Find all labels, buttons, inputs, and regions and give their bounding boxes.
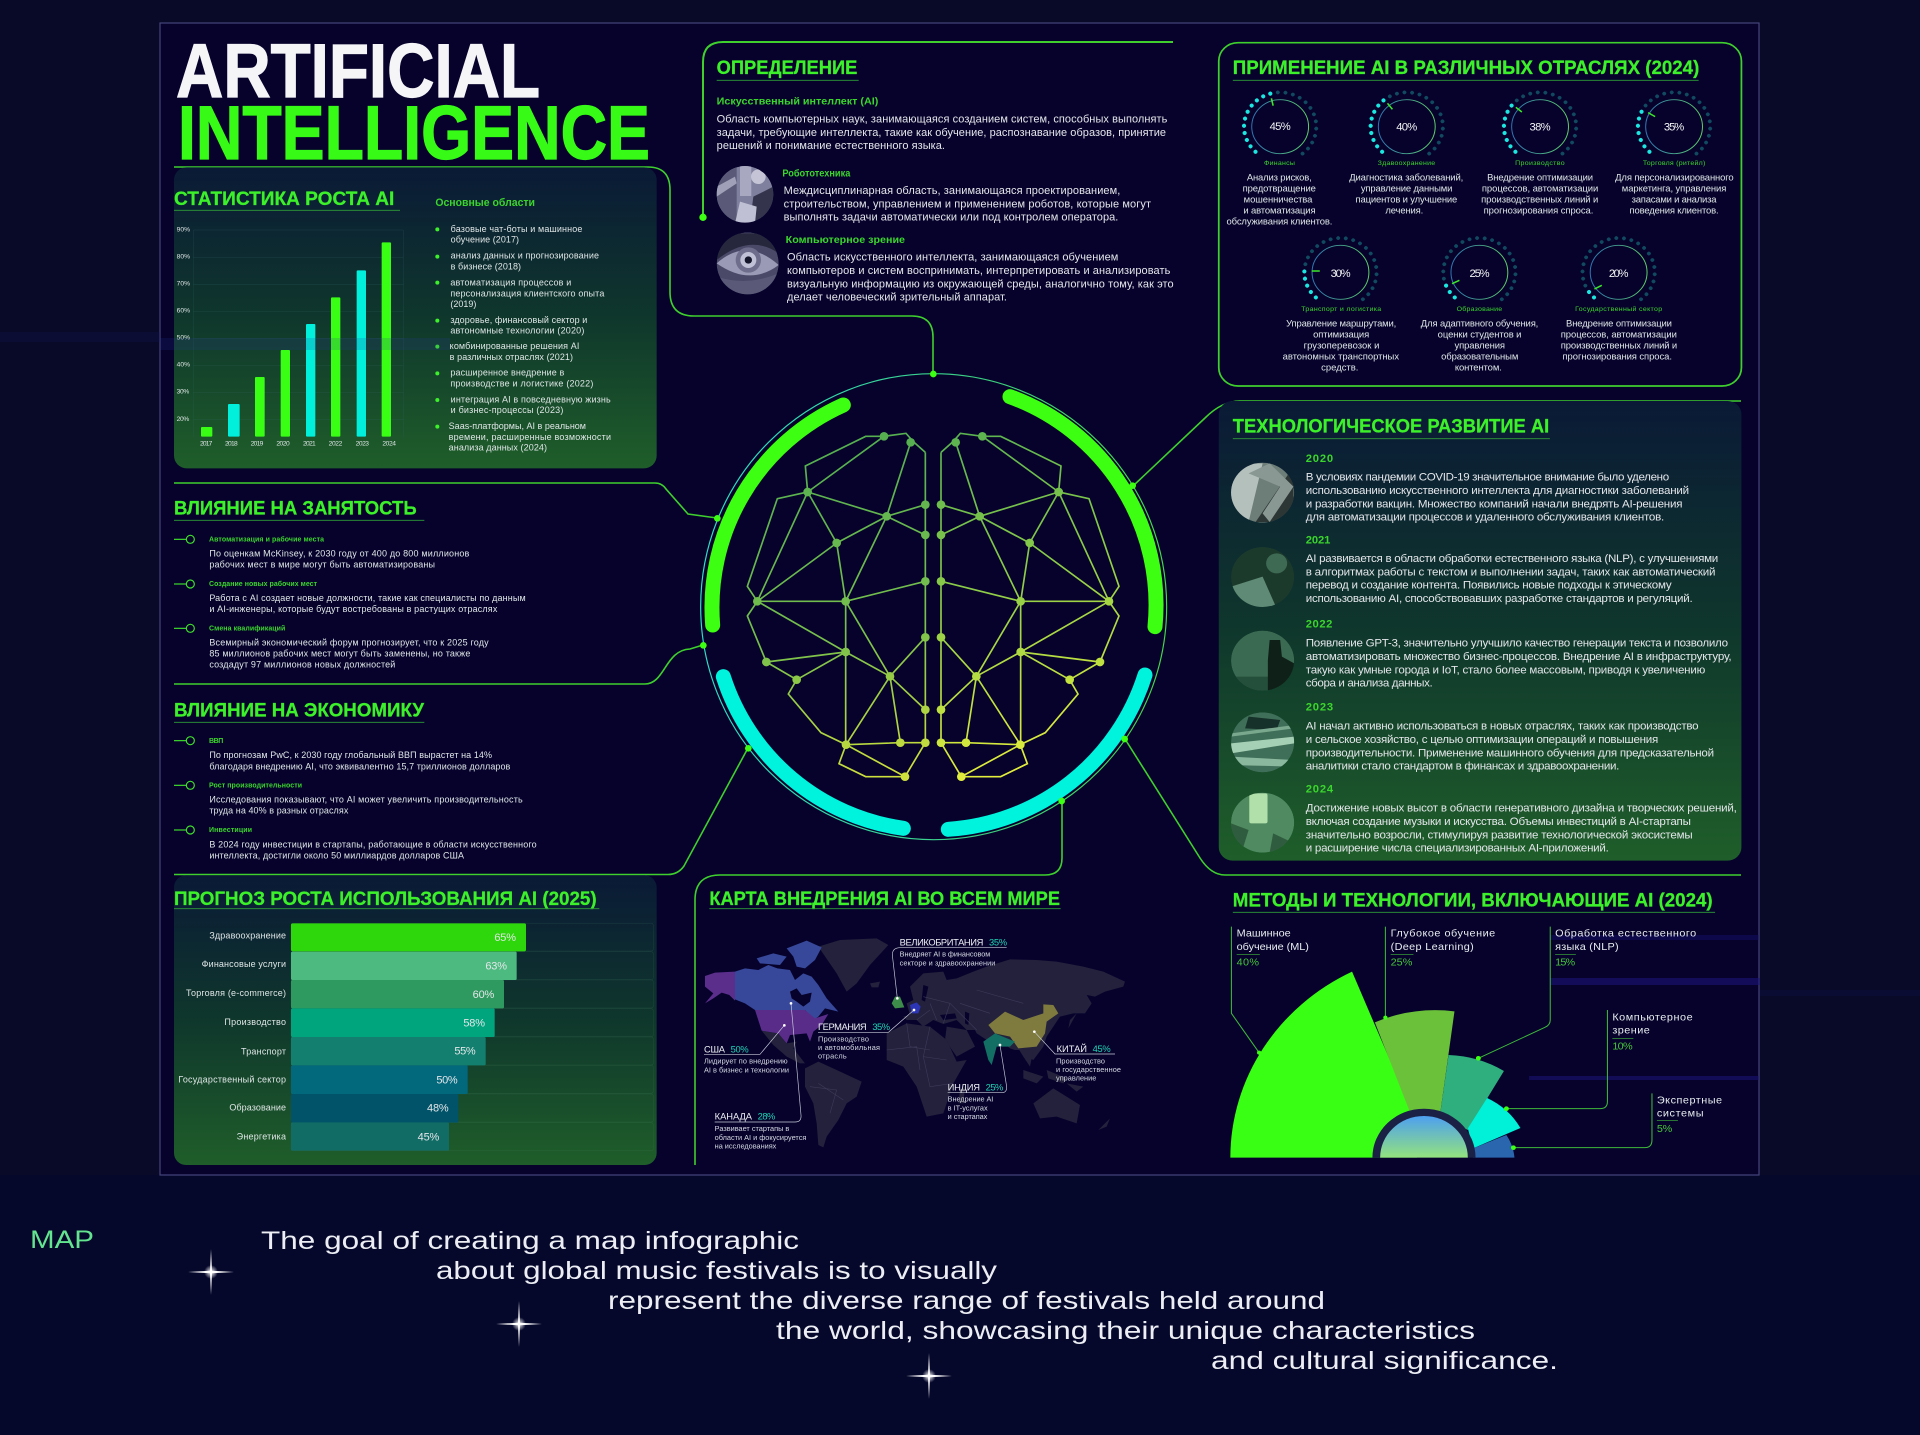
label: computer vision — [1504, 1010, 1693, 1111]
item: new jobs: Создание новых рабочих мест — [209, 580, 318, 588]
callout: USA: США — [704, 1044, 726, 1054]
horizontal bar chart: Транспорт — [241, 1046, 286, 1056]
gauge: education 25%: контентом. — [1455, 363, 1502, 372]
gauge: government 20%: производственных линий и — [1561, 341, 1677, 350]
item: investment: интеллекта, достигли около 50 миллиардов долларов США — [209, 850, 464, 860]
heading: employment: ВЛИЯНИЕ НА ЗАНЯТОСТЬ — [174, 499, 417, 520]
entry: 2020: для автоматизации процессов и удаленного обслуживания клиентов. — [1306, 512, 1664, 524]
entry: 2022 — [1231, 619, 1732, 692]
gauge: education 25%: Для адаптивного обучения, — [1421, 319, 1538, 328]
entry: 2020: В условиях пандемии COVID-19 значительное внимание было уделено — [1306, 472, 1669, 484]
list: main areas: в бизнесе (2018) — [451, 261, 521, 271]
brain: right hemisphere — [937, 432, 1119, 781]
gauge: finance 45%: мошенничества — [1244, 195, 1313, 204]
central brain diagram — [700, 371, 1167, 840]
label: NLP — [1476, 927, 1696, 1061]
bar chart: 2022 — [329, 441, 343, 448]
list: main areas: анализ данных и прогнозирование — [451, 251, 599, 261]
callout: India: ИНДИЯ — [948, 1083, 980, 1093]
title: ARTIFICIAL — [176, 29, 540, 114]
list: main areas: в различных отраслях (2021) — [450, 352, 573, 362]
horizontal bar chart: Энергетика — [237, 1132, 286, 1142]
callout: China: и государственное — [1056, 1065, 1121, 1074]
horizontal bar chart: Здравоохранение — [209, 931, 286, 941]
label: computer vision: Компьютерное — [1612, 1012, 1693, 1023]
label: deep learning: (Deep Learning) — [1391, 941, 1474, 953]
item: GDP — [174, 737, 511, 771]
entry: 2023: и сельское хозяйство, с целью оптимизации операций и повышения — [1306, 734, 1658, 746]
bar chart: 2018 — [225, 441, 238, 448]
gauge: manufacturing 38%: производственных линий и — [1481, 195, 1598, 204]
icon: sparkle 3 — [906, 1353, 952, 1399]
gauge: transport 30%: автономных транспортных — [1283, 352, 1399, 361]
horizontal bar chart — [178, 923, 653, 1151]
callout: China — [1033, 1030, 1121, 1083]
heading: statistics: СТАТИСТИКА РОСТА AI — [174, 189, 394, 210]
text: computer vision: визуальную информацию из окружающей среды, аналогично тому, как это — [787, 278, 1174, 290]
gauge: healthcare 40%: Диагностика заболеваний, — [1349, 173, 1463, 182]
entry: 2020: и разработки вакцин. Множество компаний начали внедрять AI-решения — [1306, 499, 1682, 510]
bar chart: 40% — [177, 362, 190, 369]
callout: Germany: и автомобильная — [818, 1043, 880, 1052]
list: main areas: расширенное внедрение в — [450, 368, 565, 378]
caption text: The goal of creating a map infographic — [261, 1227, 799, 1255]
gauge: education 25%: 25% — [1470, 268, 1490, 280]
list: main areas: персонализация клиентского опыта — [450, 288, 604, 298]
gauge: transport 30%: 30% — [1331, 268, 1351, 280]
entry: 2020 — [1231, 453, 1689, 524]
text: robotics: строительством, управлением и применением роботов, которые могут — [784, 198, 1151, 210]
gauge: manufacturing 38%: прогнозирования спроса. — [1484, 206, 1593, 215]
label: machine learning: обучение (ML) — [1237, 941, 1309, 953]
gauge: healthcare 40%: пациентов и улучшение — [1356, 195, 1457, 204]
horizontal bar chart: 50% — [436, 1074, 458, 1086]
callout: Canada: на исследованиях — [715, 1142, 777, 1151]
list: main areas: обучение (2017) — [451, 235, 519, 245]
text: artificial intelligence: решений и понимание естественного языка. — [717, 140, 945, 152]
label: deep learning: 25% — [1391, 957, 1413, 969]
gauge: manufacturing 38%: Внедрение оптимизации — [1487, 173, 1593, 182]
item: investment: В 2024 году инвестиции в стартапы, работающие в области искусственного — [209, 839, 537, 849]
list: main areas: интеграция AI в повседневную жизнь — [451, 394, 611, 404]
label: deep learning — [1383, 927, 1495, 1020]
item: productivity: Рост производительности — [209, 783, 302, 790]
item: new jobs: Работа с AI создает новые должности, такие как специалисты по данным — [209, 593, 526, 603]
text: artificial intelligence: Область компьютерных наук, занимающаяся созданием систем, способных выполнять — [717, 114, 1168, 126]
gauge: healthcare 40%: 40% — [1396, 122, 1418, 134]
icon: sparkle 1 — [188, 1249, 234, 1295]
entry: 2024: значительно возросли, стимулируя развитие технологической экосистемы — [1306, 830, 1693, 841]
arc: top left — [712, 405, 843, 625]
gauge: transport 30%: грузоперевозок и — [1304, 341, 1379, 350]
brain: left hemisphere — [747, 432, 930, 781]
list: main areas: автоматизация процессов и — [450, 277, 571, 287]
item: automation: рабочих мест в мире могут быть автоматизированы — [209, 560, 435, 570]
item: GDP: благодаря внедрению AI, что эквивалентно 15,7 триллионов долларов — [209, 761, 511, 771]
gauge: retail 35%: маркетинга, управления — [1622, 184, 1726, 193]
world map — [705, 938, 1125, 1147]
photo: robotics — [717, 166, 773, 223]
panel: technological development — [1219, 401, 1741, 861]
callout: India — [948, 1044, 1007, 1121]
entry: 2021 — [1231, 535, 1718, 608]
entry: 2021: перевод и создание контента. Появились новые подходы к этическому — [1306, 580, 1672, 592]
panel: employment impact — [174, 499, 526, 670]
gauge: manufacturing 38%: 38% — [1530, 122, 1551, 134]
bar chart: 20% — [177, 416, 189, 423]
callout: Canada — [715, 1002, 806, 1151]
callout: USA — [704, 1024, 789, 1074]
caption text: the world, showcasing their unique characteristics — [776, 1317, 1475, 1345]
horizontal bar chart: Производство — [224, 1017, 286, 1027]
entry: 2022: автоматизировать множество бизнес-процессов. Внедрение AI в инфраструктуру, — [1306, 651, 1732, 663]
label: machine learning: 40% — [1237, 957, 1260, 969]
entry: 2023: 2023 — [1306, 702, 1333, 714]
callout: Canada: 28% — [758, 1112, 775, 1122]
callout: UK: ВЕЛИКОБРИТАНИЯ — [900, 937, 983, 947]
callout: Germany: Производство — [818, 1034, 869, 1043]
horizontal bar chart: 48% — [427, 1103, 449, 1115]
label: machine learning: Машинное — [1237, 928, 1291, 940]
callout: UK: секторе и здравоохранении — [900, 959, 995, 968]
gauge: healthcare 40%: управление данными — [1361, 184, 1452, 193]
item: productivity: труда на 40% в разных отраслях — [209, 806, 349, 816]
arc: bottom right — [948, 675, 1145, 829]
list: main areas: Основные области — [435, 197, 535, 209]
horizontal bar chart: 63% — [485, 960, 507, 972]
arc: bottom left — [723, 677, 903, 828]
entry: 2021: в алгоритмах работы с текстом и выполнении задач, таких как автоматический — [1306, 567, 1715, 578]
gauge: education 25%: оценки студентов и — [1438, 330, 1521, 339]
gauge: government 20%: 20% — [1609, 268, 1629, 280]
bar chart: 2017 — [200, 441, 213, 448]
gauge: education 25% — [1421, 224, 1538, 372]
connector lines — [174, 42, 1741, 1165]
heading: forecast: ПРОГНОЗ РОСТА ИСПОЛЬЗОВАНИЯ AI (2025) — [174, 889, 597, 910]
ring connector dots — [700, 371, 1136, 804]
bar chart: 90% — [177, 226, 190, 233]
list: main areas: Saas-платформы, AI в реальном — [449, 421, 586, 431]
gauge: healthcare 40%: Здавоохранение — [1378, 160, 1435, 167]
item: productivity — [174, 781, 523, 816]
label: expert systems — [1511, 1093, 1722, 1150]
text: computer vision: Компьютерное зрение — [786, 235, 905, 246]
callout: India: 25% — [986, 1083, 1003, 1093]
entry: 2023: AI начал активно использоваться в новых отраслях, таких как производство — [1306, 721, 1699, 733]
panel: world map — [704, 889, 1125, 1151]
callout: UK: 35% — [989, 937, 1007, 947]
horizontal bar chart: Торговля (e-commerce) — [186, 988, 286, 998]
entry: 2022: 2022 — [1306, 619, 1332, 631]
bar chart: 2024 — [382, 441, 396, 448]
label: computer vision: зрение — [1612, 1025, 1650, 1037]
heading: methods: МЕТОДЫ И ТЕХНОЛОГИИ, ВКЛЮЧАЮЩИЕ AI (2024) — [1233, 890, 1713, 911]
text: robotics: Робототехника — [782, 167, 851, 179]
callout: USA: 50% — [731, 1044, 749, 1054]
heading: applications: ПРИМЕНЕНИЕ AI В РАЗЛИЧНЫХ ОТРАСЛЯХ (2024) — [1233, 57, 1699, 79]
horizontal bar chart: 45% — [418, 1131, 440, 1143]
label: computer vision: 10% — [1612, 1041, 1633, 1052]
gauge: finance 45%: Финансы — [1264, 160, 1295, 167]
text: computer vision: делает человеческий зрительный аппарат. — [787, 292, 1007, 304]
horizontal bar chart: 65% — [494, 932, 516, 944]
caption text — [261, 1227, 1558, 1375]
bar chart: 2023 — [356, 441, 369, 448]
gauge: manufacturing 38%: процессов, автоматизации — [1482, 184, 1598, 193]
item: investment — [174, 826, 537, 860]
label: expert systems: системы — [1657, 1108, 1704, 1120]
callout: Canada: области AI и фокусируется — [715, 1133, 806, 1142]
callout: UK: Внедряет AI в финансовом — [900, 950, 990, 959]
photo: eye — [717, 232, 779, 294]
bar chart: 2019 — [251, 441, 264, 448]
bar chart: 70% — [177, 281, 190, 288]
gauge: education 25%: управления — [1454, 341, 1505, 350]
entry: 2024: включая создание музыки и искусства. Объемы инвестиций в AI-стартапы — [1306, 816, 1691, 828]
item: automation: По оценкам McKinsey, к 2030 году от 400 до 800 миллионов — [209, 548, 470, 558]
heading: map: КАРТА ВНЕДРЕНИЯ AI ВО ВСЕМ МИРЕ — [709, 889, 1060, 910]
callout: USA: AI в бизнес и технологии — [704, 1065, 789, 1074]
list: main areas — [435, 197, 611, 453]
gauge: transport 30% — [1283, 224, 1399, 372]
label: expert systems: 5% — [1657, 1123, 1673, 1135]
gauge: finance 45%: Анализ рисков, — [1247, 173, 1312, 182]
bar chart: 30% — [177, 389, 189, 396]
item: GDP: ВВП — [209, 738, 223, 745]
radial chart — [1230, 972, 1520, 1158]
text: robotics: Междисциплинарная область, занимающаяся проектированием, — [784, 185, 1120, 197]
horizontal bar chart: Государственный сектор — [178, 1074, 286, 1084]
caption text: about global music festivals is to visually — [436, 1257, 998, 1285]
panel: definition — [699, 58, 1174, 304]
text: robotics — [782, 167, 1151, 224]
callout: China: 45% — [1093, 1044, 1111, 1054]
entry: 2022: Появление GPT-3, значительно улучшило качество генерации текста и позволило — [1306, 638, 1728, 650]
label: deep learning: Глубокое обучение — [1391, 928, 1495, 940]
text: artificial intelligence: Искусственный интеллект (AI) — [717, 97, 878, 108]
gauge: manufacturing 38%: Производство — [1515, 160, 1565, 167]
callout: Germany: ГЕРМАНИЯ — [818, 1022, 867, 1032]
item: new jobs — [174, 580, 526, 614]
item: requalification: Смена квалификаций — [209, 624, 285, 632]
gauge: education 25%: Образование — [1457, 305, 1502, 313]
entry: 2021: AI развивается в области обработки естественного языка (NLP), с улучшениями — [1306, 553, 1718, 565]
horizontal bar chart: 55% — [454, 1046, 476, 1058]
heading: economy: ВЛИЯНИЕ НА ЭКОНОМИКУ — [174, 700, 424, 721]
list: main areas: производстве и логистике (2022) — [450, 378, 593, 388]
entry: 2024 — [1231, 784, 1737, 855]
heading: definition: ОПРЕДЕЛЕНИЕ — [717, 58, 857, 79]
gauge: government 20%: процессов, автоматизации — [1561, 330, 1677, 339]
callout: Canada: КАНАДА — [715, 1112, 753, 1122]
item: new jobs: и AI-инженеры, которые будут востребованы в растущих отраслях — [209, 604, 498, 614]
entry: 2023: аналитики стало стандартом в финансах и здравоохранении. — [1306, 761, 1619, 773]
item: investment: Инвестиции — [209, 827, 252, 834]
entry: 2020: 2020 — [1306, 453, 1333, 465]
item: automation: Автоматизация и рабочие места — [209, 536, 324, 544]
gauge: finance 45% — [1226, 78, 1332, 226]
gauge: transport 30%: Управление маршрутами, — [1286, 319, 1396, 328]
gauge: retail 35%: запасами и анализа — [1632, 195, 1717, 204]
caption label: MAP: MAP — [30, 1226, 94, 1254]
callout: China: управление — [1056, 1074, 1096, 1083]
item: automation — [174, 535, 470, 570]
list: main areas: (2019) — [450, 299, 476, 309]
text: robotics: выполнять задачи автоматически или под контролем оператора. — [784, 212, 1118, 224]
entry: 2024: 2024 — [1306, 784, 1334, 796]
gauge: transport 30%: Транспорт и логистика — [1301, 306, 1381, 313]
entry: 2021: 2021 — [1306, 535, 1330, 546]
bar chart: 2021 — [303, 441, 316, 448]
gauge: retail 35%: поведения клиентов. — [1630, 206, 1719, 215]
text: computer vision — [786, 235, 1174, 304]
arc: top right — [1010, 397, 1156, 627]
entry: 2024: и расширение числа специализированных AI-приложений. — [1306, 843, 1609, 855]
entry: 2023: производительности. Применение машинного обучения для предсказательной — [1306, 748, 1714, 759]
gauge: transport 30%: средств. — [1321, 363, 1358, 372]
callout: China: КИТАЙ — [1057, 1043, 1087, 1054]
item: requalification: Всемирный экономический форум прогнозирует, что к 2025 году — [209, 638, 489, 648]
gauge: finance 45%: 45% — [1270, 121, 1291, 133]
label: expert systems: Экспертные — [1657, 1095, 1722, 1106]
item: GDP: По прогнозам PwC, к 2030 году глобальный ВВП вырастет на 14% — [209, 750, 492, 760]
label: NLP: 15% — [1555, 957, 1576, 969]
panel: growth forecast — [174, 875, 657, 1165]
callout: India: и стартапах — [948, 1112, 988, 1121]
entry: 2024: Достижение новых высот в области генеративного дизайна и творческих решений, — [1306, 803, 1737, 815]
callout: India: Внедрение AI — [948, 1095, 993, 1104]
callout: Germany: отрасль — [818, 1052, 847, 1061]
panel: growth statistics — [174, 167, 657, 468]
item: requalification: создадут 97 миллионов новых должностей — [209, 660, 395, 670]
list: main areas: анализа данных (2024) — [449, 443, 547, 453]
callout: Germany — [818, 1009, 915, 1061]
label: machine learning — [1231, 927, 1309, 1055]
horizontal bar chart: 60% — [473, 989, 495, 1001]
bar chart: 80% — [177, 254, 190, 261]
panel: economy impact — [174, 700, 537, 860]
caption text: and cultural significance. — [1211, 1347, 1558, 1375]
gauge: finance 45%: обслуживания клиентов. — [1226, 217, 1332, 226]
gauge: government 20%: прогнозирования спроса. — [1563, 352, 1672, 361]
text: artificial intelligence — [717, 97, 1168, 152]
gauge: retail 35%: Для персонализированного — [1615, 173, 1734, 182]
item: requalification: 85 миллионов рабочих мест могут быть заменены, но также — [209, 649, 470, 659]
gauge: retail 35%: Торговля (ритейл) — [1643, 159, 1705, 167]
text: computer vision: Область искусственного интеллекта, занимающаяся обучением — [787, 252, 1118, 264]
callout: India: в IT-услугах — [948, 1103, 988, 1112]
list: main areas: базовые чат-боты и машинное — [451, 224, 582, 234]
gauge: government 20%: Внедрение оптимизации — [1566, 319, 1672, 328]
bar chart: 60% — [177, 308, 190, 315]
gauge: education 25%: образовательным — [1441, 352, 1518, 361]
item: productivity: Исследования показывают, что AI может увеличить производительность — [209, 795, 523, 805]
list: main areas: автономные технологии (2020) — [450, 326, 584, 336]
bar chart: 2020 — [276, 441, 290, 448]
entry: 2022: такую как умные города и IoT, стало более массовым, приводя к увеличению — [1306, 665, 1705, 676]
entry: 2020: использованию искусственного интеллекта для диагностики заболеваний — [1306, 485, 1689, 497]
gauge: retail 35% — [1615, 78, 1734, 215]
horizontal bar chart: Образование — [229, 1103, 286, 1113]
gauge: manufacturing 38% — [1481, 78, 1598, 215]
label: NLP: языка (NLP) — [1555, 941, 1619, 953]
gauge: healthcare 40%: лечения. — [1385, 206, 1423, 215]
bar chart — [177, 226, 403, 448]
entry: 2022: сбора и анализа данных. — [1306, 678, 1433, 690]
gauge: retail 35%: 35% — [1664, 122, 1685, 133]
title: INTELLIGENCE — [178, 91, 650, 176]
icon: sparkle 2 — [496, 1301, 542, 1347]
outer ring — [701, 374, 1167, 840]
heading: tech development: ТЕХНОЛОГИЧЕСКОЕ РАЗВИТИЕ AI — [1233, 416, 1549, 438]
gauge: transport 30%: оптимизация — [1313, 330, 1369, 339]
title — [176, 29, 650, 176]
gauge: healthcare 40% — [1349, 78, 1463, 215]
entry: 2021: использованию AI, способствовавших разработке стандартов и регуляций. — [1306, 593, 1693, 605]
entry: 2023 — [1231, 702, 1714, 773]
gauge: finance 45%: и автоматизация — [1243, 206, 1316, 215]
list: main areas: и бизнес-процессы (2023) — [451, 405, 563, 415]
gauge: finance 45%: предотвращение — [1243, 184, 1316, 193]
label: NLP: Обработка естественного — [1555, 928, 1696, 940]
caption text: represent the diverse range of festivals held around — [608, 1287, 1325, 1315]
item: requalification — [174, 624, 489, 670]
bar chart: 50% — [177, 335, 190, 342]
gauge: government 20%: Государственный сектор — [1575, 305, 1662, 313]
callout: Germany: 35% — [872, 1022, 890, 1032]
text: artificial intelligence: задачи, требующие интеллекта, такие как обучение, распознавание образов, принятие — [717, 127, 1166, 139]
text: computer vision: компьютеров и систем воспринимать, интерпретировать и анализировать — [787, 265, 1171, 277]
callout: UK — [892, 937, 1007, 1000]
callout: China: Производство — [1056, 1056, 1105, 1065]
gauge: government 20% — [1561, 224, 1677, 361]
panel: methods and technologies — [1230, 890, 1722, 1158]
callout: Canada: Развивает стартапы в — [715, 1124, 789, 1133]
horizontal bar chart: 58% — [463, 1017, 485, 1029]
list: main areas: комбинированные решения AI — [450, 341, 579, 351]
horizontal bar chart: Финансовые услуги — [202, 959, 286, 969]
list: main areas: здоровье, финансовый сектор и — [450, 315, 587, 325]
list: main areas: времени, расширенные возможности — [449, 432, 611, 442]
callout: USA: Лидирует по внедрению — [704, 1057, 788, 1066]
panel: AI applications by industry — [1219, 43, 1741, 386]
